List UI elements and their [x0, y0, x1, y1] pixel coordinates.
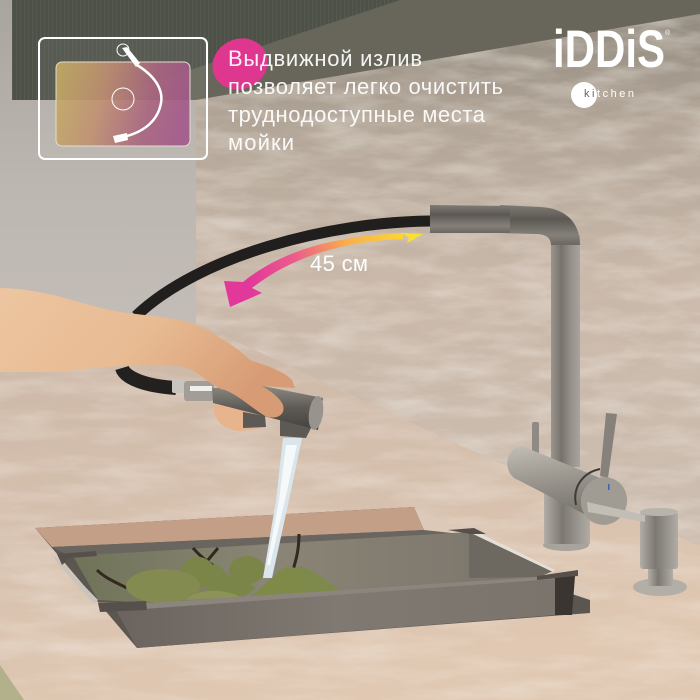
- flexible hose lower: [122, 368, 176, 388]
- basket corner brackets: [57, 528, 578, 612]
- faucet ring: [117, 44, 129, 56]
- faucet: [430, 205, 645, 551]
- small lever: [532, 422, 539, 460]
- big lever: [600, 413, 617, 478]
- upper cabinet: [12, 0, 700, 100]
- end cap: [574, 471, 634, 531]
- soap dispenser: [633, 508, 687, 596]
- countertop: [0, 320, 700, 700]
- body horizontal: [507, 446, 612, 516]
- spout vertical pipe: [551, 235, 580, 467]
- spout horizontal with outlet: [430, 205, 510, 233]
- basket front wall: [116, 578, 555, 648]
- kitchen blob: [571, 82, 597, 108]
- drain circle: [112, 88, 134, 110]
- basket rails: [55, 556, 98, 604]
- inset diagram: hose pull-out: [39, 38, 207, 159]
- chrome connector: [172, 379, 186, 393]
- wordmark: iDDiS: [553, 20, 665, 79]
- water stream: [263, 438, 302, 578]
- left wall: [0, 0, 200, 380]
- arm and hand: [0, 288, 295, 418]
- end cap ring: [575, 469, 600, 505]
- gradient sink: [56, 62, 190, 146]
- cabinet corner bottom left: [0, 665, 24, 700]
- description lines: Выдвижной излив: [228, 46, 422, 71]
- sprayer head: [172, 379, 325, 438]
- flexible hose upper: [136, 221, 430, 316]
- curved arrow 45 cm: [224, 233, 423, 307]
- soap pipe front: [587, 502, 645, 522]
- pink accent blob: [204, 30, 276, 98]
- pears: [97, 534, 340, 603]
- registered mark: ®: [665, 29, 671, 37]
- sprayer end cap: [307, 395, 325, 431]
- faucet base: [543, 539, 589, 551]
- description lines: мойки: [228, 130, 294, 155]
- description lines: позволяет легко очистить: [228, 74, 503, 99]
- kitchen label: kitchen: [584, 88, 634, 100]
- spout elbow: [500, 205, 580, 245]
- description lines: труднодоступные места: [228, 102, 486, 127]
- fingers behind sprayer: [214, 405, 262, 431]
- sink: [35, 507, 590, 648]
- description lines: [228, 46, 503, 155]
- text: description: [204, 30, 503, 155]
- sprayer body: [212, 386, 323, 430]
- nozzle small: [243, 412, 266, 428]
- stone backsplash: [190, 10, 700, 550]
- sink cut-out edge: [35, 507, 590, 648]
- measurement label: 45 см: [310, 251, 368, 276]
- logo: iddis kitchen: [553, 20, 671, 108]
- nozzle large: [280, 420, 312, 438]
- basket interior: [73, 532, 553, 603]
- hose glyph: [113, 47, 161, 143]
